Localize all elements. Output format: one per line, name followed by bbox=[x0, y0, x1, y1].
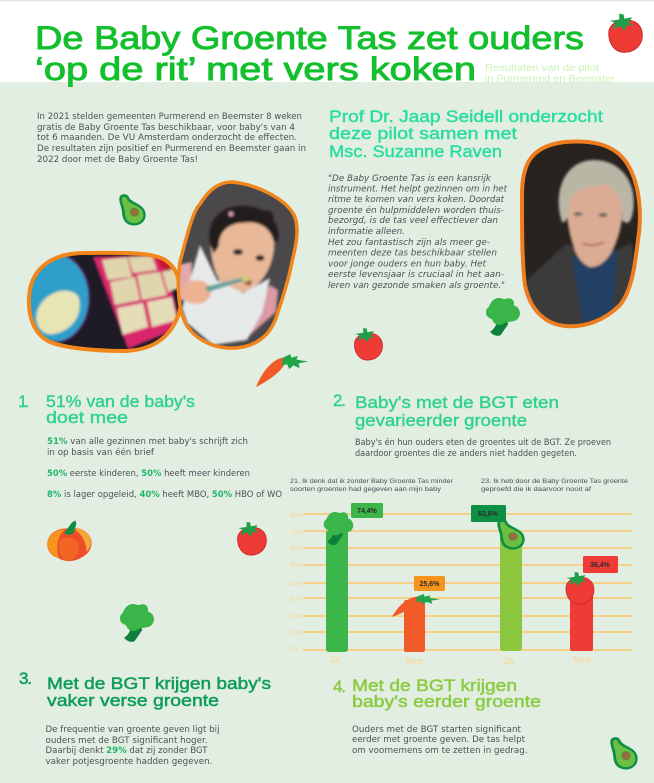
value 36,4%: 36,4% bbox=[590, 562, 611, 569]
chart captions bbox=[290, 478, 628, 493]
title bbox=[35, 20, 584, 87]
section 4 text: eerder met groente geven. De tas helpt bbox=[352, 735, 526, 745]
category labels: Ja bbox=[329, 655, 340, 666]
section 4 text: Ouders met de BGT starten significant bbox=[352, 725, 522, 735]
value 74,4%: 74,4% bbox=[357, 508, 378, 515]
section 2 text: daardoor groentes die ze anders niet hadden gegeten. bbox=[355, 449, 577, 459]
icon: avocado bottom right bbox=[610, 737, 638, 769]
bar: Ja 74,4% bbox=[326, 530, 348, 652]
axis labels: 10% bbox=[290, 631, 303, 637]
bar: Nee 25,6% bbox=[404, 600, 425, 652]
section 2 text: Baby's én hun ouders eten de groentes uit de BGT. Ze proeven bbox=[355, 437, 611, 448]
category labels bbox=[329, 655, 592, 667]
intro text: De resultaten zijn positief en Purmerend en Beemster gaan in bbox=[37, 144, 306, 154]
section 1 heading bbox=[18, 392, 195, 427]
icon: carrot bbox=[256, 354, 308, 387]
subtitle bbox=[485, 63, 616, 85]
section 3 text: ouders met de BGT significant hoger. bbox=[46, 736, 208, 746]
axis labels: 20% bbox=[290, 614, 303, 620]
heading: Prof Seidell bbox=[329, 107, 603, 161]
intro text: In 2021 stelden gemeenten Purmerend en Beemster 8 weken bbox=[37, 112, 302, 122]
value 25,6% bbox=[414, 576, 445, 591]
value 63,6%: 63,6% bbox=[478, 511, 499, 518]
category labels: Nee bbox=[405, 656, 424, 667]
section 1 text: 50% eerste kinderen, 50% heeft meer kinderen bbox=[47, 469, 250, 479]
value 36,4% bbox=[583, 556, 618, 573]
photo: portrait bbox=[518, 140, 643, 330]
icon: broccoli bbox=[486, 298, 520, 336]
value 25,6%: 25,6% bbox=[420, 581, 440, 588]
section 1 text bbox=[47, 437, 282, 500]
quote: groente én hulpmiddelen worden thuis- bbox=[328, 205, 504, 216]
icon: tomato bbox=[238, 522, 266, 555]
axis labels: 70% bbox=[290, 530, 303, 536]
icon: tomato bbox=[566, 572, 594, 604]
intro text: 2022 door met de Baby Groente Tas! bbox=[37, 155, 198, 165]
section 4 heading: 4. bbox=[333, 677, 346, 696]
section 3 text: Daarbij denkt 29% dat zij zonder BGT bbox=[46, 746, 208, 756]
icon: tomato bbox=[354, 328, 382, 360]
axis labels bbox=[290, 513, 303, 653]
quote: meenten deze tas beschikbaar stellen bbox=[328, 248, 497, 258]
section 2 heading: 2. bbox=[333, 391, 346, 410]
title: ‘op de rit’ met vers koken bbox=[35, 51, 476, 87]
photo: baby eating bbox=[175, 178, 300, 353]
section 1 heading: doet mee bbox=[46, 408, 128, 427]
category labels: Nee bbox=[573, 655, 592, 666]
axis labels: 60% bbox=[290, 546, 303, 552]
chart captions: 21. Ik denk dat ik zonder Baby Groente Tas minder bbox=[290, 478, 454, 485]
section 2 heading: Baby's met de BGT eten bbox=[355, 393, 559, 412]
section 4 heading bbox=[333, 676, 541, 711]
section 1 text: 51% van alle gezinnen met baby's schrijft zich bbox=[47, 437, 248, 447]
quote: eerste levensjaar is cruciaal in het aan- bbox=[328, 270, 504, 280]
icon: broccoli bbox=[324, 512, 353, 545]
section 3 heading: 3. bbox=[19, 669, 32, 688]
chart captions: geproefd die ik daarvoor nooit af bbox=[481, 486, 591, 493]
icon: avocado bbox=[497, 519, 525, 550]
icon: tomato top right bbox=[609, 14, 642, 52]
section 1 text: in op basis van één brief bbox=[47, 447, 155, 458]
section 4 heading: baby's eerder groente bbox=[352, 692, 541, 711]
heading: Prof Seidell: deze pilot samen met bbox=[329, 124, 517, 143]
section 4 text: om voornemens om te zetten in gedrag. bbox=[352, 746, 528, 756]
section 3 heading: Met de BGT krijgen baby's bbox=[47, 674, 271, 693]
section 1 heading: 51% van de baby's bbox=[46, 392, 195, 411]
quote: Het zou fantastisch zijn als meer ge- bbox=[328, 238, 490, 248]
subtitle: Resultaten van de pilot bbox=[485, 63, 599, 74]
section 3 text: De frequentie van groente geven ligt bij bbox=[46, 725, 220, 735]
chart captions: soorten groenten had gegeven aan mijn baby bbox=[290, 486, 442, 493]
quote: instrument. Het helpt gezinnen om in het bbox=[328, 184, 508, 194]
section 1 heading: 1. bbox=[18, 392, 29, 411]
value 74,4% bbox=[351, 503, 383, 518]
quote: informatie alleen. bbox=[328, 227, 405, 237]
section 3 heading bbox=[19, 669, 271, 710]
heading: Prof Seidell: Msc. Suzanne Raven bbox=[329, 142, 502, 161]
quote bbox=[328, 174, 508, 291]
quote: ritme te komen van vers koken. Doordat bbox=[328, 195, 505, 205]
bar: Nee 36,4% bbox=[570, 590, 593, 651]
chart captions: 23. Ik heb door de Baby Groente Tas groente bbox=[481, 478, 628, 485]
quote: "De Baby Groente Tas is een kansrijk bbox=[328, 174, 492, 184]
quote: bezorgd, is de tas veel effectiever dan bbox=[328, 216, 498, 226]
title: De Baby Groente Tas zet ouders bbox=[35, 20, 584, 56]
section 2 heading: gevarieerder groente bbox=[355, 411, 527, 430]
axis labels: 0% bbox=[290, 647, 299, 653]
section 1 text: 8% is lager opgeleid, 40% heeft MBO, 50% HBO of WO bbox=[47, 490, 282, 500]
axis labels: 50% bbox=[290, 563, 303, 569]
section 4 text bbox=[352, 725, 528, 756]
intro text bbox=[37, 112, 306, 165]
quote: leren van gezonde smaken als groente." bbox=[328, 281, 505, 291]
quote: voor jonge ouders en hun baby. Het bbox=[328, 260, 487, 270]
photo: baby food tray bbox=[21, 250, 185, 355]
category labels: Ja bbox=[503, 656, 514, 667]
icon: pumpkin bbox=[47, 520, 92, 561]
subtitle: in Purmerend en Beemster bbox=[485, 74, 616, 85]
icon: avocado bbox=[119, 194, 146, 226]
axis labels: 40% bbox=[290, 582, 303, 588]
section 4 heading: Met de BGT krijgen bbox=[352, 676, 517, 695]
section 2 heading bbox=[333, 391, 559, 430]
bar: Ja 63,6% bbox=[500, 535, 522, 651]
section 2 text bbox=[355, 437, 611, 459]
axis labels: 80% bbox=[290, 513, 303, 519]
intro text: gratis de Baby Groente Tas beschikbaar, voor baby's van 4 bbox=[37, 123, 295, 133]
section 3 text: vaker potjesgroente hadden gegeven. bbox=[46, 757, 212, 767]
section 3 text bbox=[46, 725, 220, 767]
value 63,6% bbox=[471, 505, 506, 522]
icon: broccoli bbox=[120, 604, 154, 642]
heading: Prof Seidell: Prof Dr. Jaap Seidell onderzocht bbox=[329, 107, 603, 126]
axis labels: 30% bbox=[290, 597, 303, 603]
section 3 heading: vaker verse groente bbox=[47, 691, 219, 710]
bar chart bbox=[290, 503, 632, 667]
icon: carrot bbox=[392, 594, 440, 617]
intro text: tot 6 maanden. De VU Amsterdam onderzocht de effecten. bbox=[37, 133, 297, 143]
